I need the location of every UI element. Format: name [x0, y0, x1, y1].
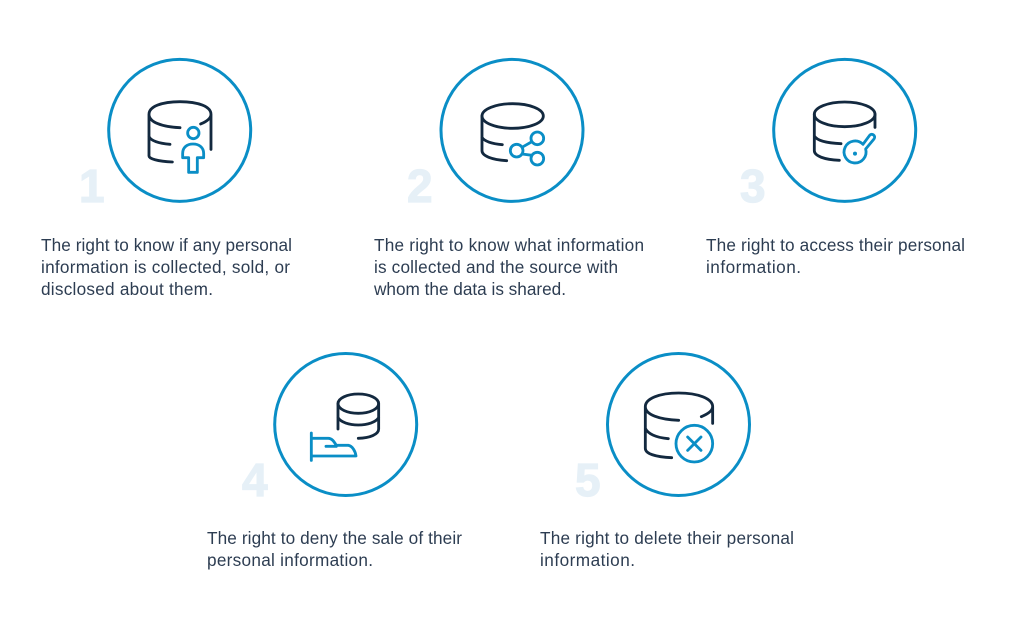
circle 2: [441, 59, 583, 201]
number 5: 5: [575, 454, 601, 506]
icon: hand offering database: [311, 394, 379, 460]
text block 2: is collected and the source with: [374, 257, 618, 277]
text block 3: The right to access their personal: [706, 235, 965, 255]
panel: right 5: [540, 354, 794, 570]
text block 1: The right to know if any personal: [41, 235, 292, 255]
panel: right 3: [706, 59, 965, 277]
circle 5: [608, 354, 750, 496]
text block 1: disclosed about them.: [41, 279, 213, 299]
number 4: 4: [242, 454, 268, 506]
icon: database with key: [814, 102, 875, 163]
text block 5: The right to delete their personal: [540, 528, 794, 548]
text block 1: information is collected, sold, or: [41, 257, 290, 277]
text block 3: information.: [706, 257, 801, 277]
number 1: 1: [79, 160, 105, 212]
circle 1: [109, 59, 251, 201]
number 3: 3: [740, 160, 766, 212]
icon: database with share nodes: [482, 104, 544, 165]
panel: right 1: [41, 59, 292, 299]
text block 5: information.: [540, 550, 635, 570]
icon: database with person: [149, 102, 211, 172]
circle 3: [774, 59, 916, 201]
text block 4: personal information.: [207, 550, 373, 570]
icon: database with delete mark: [645, 393, 713, 462]
circle 4: [275, 354, 417, 496]
text block 2: The right to know what information: [374, 235, 644, 255]
panel: right 4: [207, 354, 462, 570]
text block 2: whom the data is shared.: [373, 279, 566, 299]
number 2: 2: [407, 160, 433, 212]
text block 4: The right to deny the sale of their: [207, 528, 462, 548]
panel: right 2: [373, 59, 644, 299]
